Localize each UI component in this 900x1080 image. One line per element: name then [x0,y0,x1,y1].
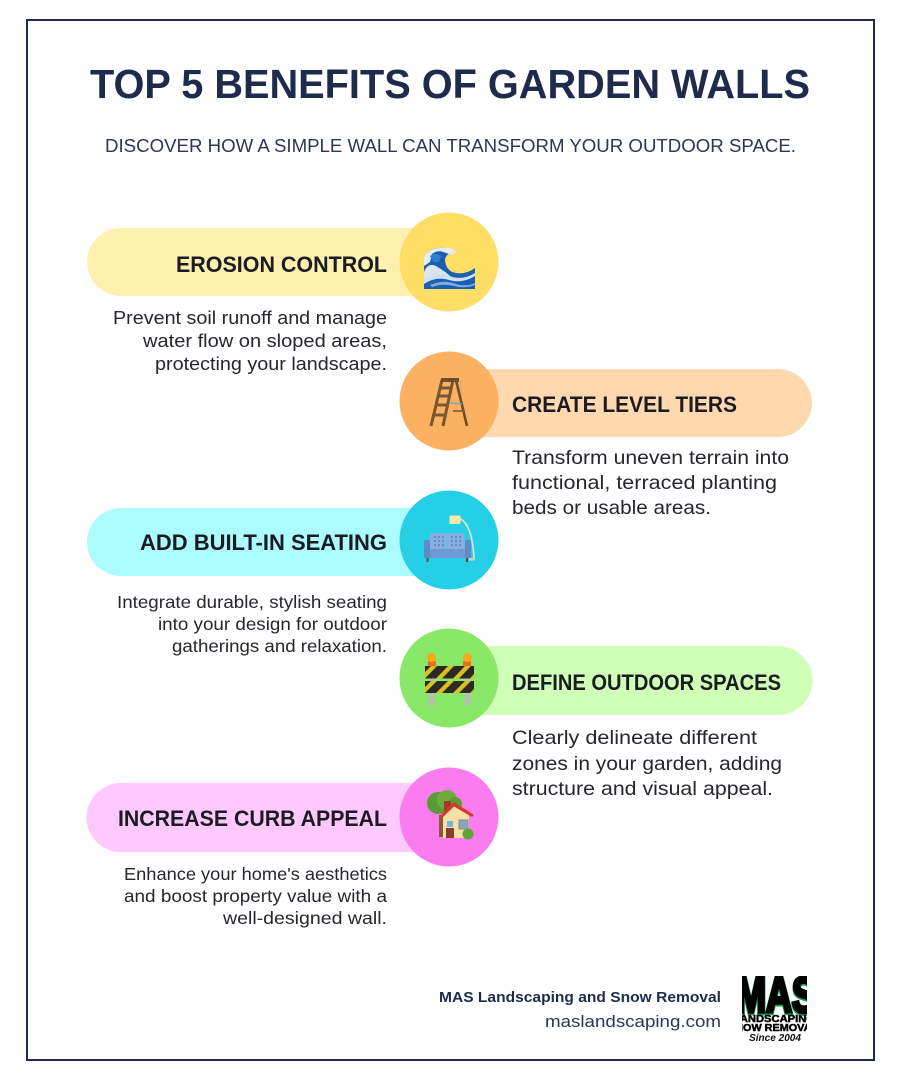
icon: ladder [431,380,467,426]
text: erosion control: protecting your landscape. [155,354,387,374]
badge: define outdoor spaces [400,628,498,728]
pill: add built-in seating [87,508,440,576]
text: erosion control: Prevent soil runoff and manage [113,308,387,328]
text: increase curb appeal [124,864,387,928]
badge: create level tiers [400,352,498,450]
logo: MAS Landscaping: Since 2004 [749,1033,801,1044]
badge: add built-in seating [400,490,498,590]
text: erosion control [113,308,387,374]
text: increase curb appeal: and boost property value with a [124,886,387,906]
text: increase curb appeal: well-designed wall. [222,908,387,928]
logo: MAS Landscaping: LANDSCAPING [733,1014,815,1025]
footer: company name: MAS Landscaping and Snow Removal [439,990,721,1006]
text: create level tiers: functional, terraced planting [512,472,777,494]
logo: MAS Landscaping: MAS [736,968,816,1024]
text: add built-in seating: Integrate durable, stylish seating [117,592,387,612]
heading: define outdoor spaces: DEFINE OUTDOOR SPACES [512,670,781,695]
text: erosion control: water flow on sloped areas, [142,331,387,351]
text: add built-in seating: into your design for outdoor [158,614,387,634]
panel: define outdoor spaces [400,628,813,800]
panel: erosion control [87,212,499,374]
pill: erosion control [87,228,440,296]
heading: erosion control: EROSION CONTROL [176,252,387,277]
icon: sofa and lamp [424,516,475,562]
logo: MAS Landscaping: SNOW REMOVAL [728,1023,818,1034]
title: TOP 5 BENEFITS OF GARDEN WALLS [90,61,810,107]
text: create level tiers [512,447,789,519]
heading: create level tiers: CREATE LEVEL TIERS [512,392,737,417]
logo: MAS Landscaping: MAS [736,967,816,1023]
text: define outdoor spaces: structure and visual appeal. [512,778,773,800]
text: create level tiers: Transform uneven terrain into [512,447,789,469]
text: add built-in seating [117,592,387,656]
text: define outdoor spaces: Clearly delineate different [512,727,758,749]
text: increase curb appeal: Enhance your home's aesthetics [124,864,387,884]
heading: increase curb appeal: INCREASE CURB APPEAL [118,806,387,831]
logo: MAS Landscaping [742,976,807,1041]
pill: create level tiers [458,369,812,437]
panel: add built-in seating [87,490,498,656]
text: define outdoor spaces [512,727,782,800]
badge: erosion control [400,212,498,312]
icon: wave [424,248,475,289]
pill: define outdoor spaces [458,646,813,715]
heading: add built-in seating: ADD BUILT-IN SEATING [140,530,387,555]
text: create level tiers: beds or usable areas. [512,497,711,519]
panel: create level tiers [400,352,812,519]
panel: increase curb appeal [87,768,499,928]
subtitle: DISCOVER HOW A SIMPLE WALL CAN TRANSFORM YOUR OUTDOOR SPACE. [105,136,796,156]
footer: website: maslandscaping.com [545,1013,721,1031]
text: define outdoor spaces: zones in your garden, adding [512,753,782,775]
icon: house and tree [427,790,474,840]
text: add built-in seating: gatherings and relaxation. [172,636,387,656]
pill: increase curb appeal [87,783,440,852]
icon: barricade [425,653,474,705]
badge: increase curb appeal [400,768,498,866]
